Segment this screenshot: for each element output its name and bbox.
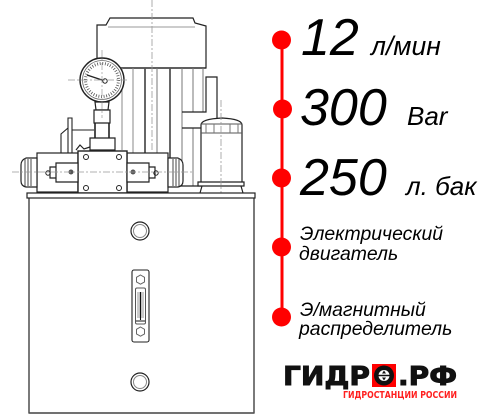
motor label: двигатель bbox=[299, 243, 398, 265]
flow value bbox=[301, 9, 441, 67]
tank value bbox=[299, 149, 478, 207]
flow value: л/мин bbox=[369, 31, 441, 61]
directional valve block bbox=[12, 151, 192, 193]
marker: pressure bbox=[273, 100, 292, 118]
electric motor bbox=[97, 0, 217, 186]
tank value: 250 bbox=[299, 149, 387, 207]
marker: valve bbox=[272, 308, 291, 326]
logo tagline: ГИДРОСТАНЦИИ РОССИИ bbox=[343, 390, 457, 401]
oil level sight gauge bbox=[132, 270, 149, 342]
pressure gauge dial bbox=[68, 50, 128, 118]
pressure value: Bar bbox=[407, 101, 449, 131]
marker: tank volume bbox=[272, 168, 291, 188]
marker: flow bbox=[272, 30, 291, 50]
oil filter bbox=[198, 100, 244, 193]
pressure value bbox=[300, 79, 449, 137]
valve label bbox=[298, 299, 452, 340]
valve label: распределитель bbox=[298, 318, 452, 340]
pressure gauge stem and bracket bbox=[61, 102, 115, 153]
marker: electric motor bbox=[272, 238, 291, 256]
logo emblem bbox=[372, 364, 396, 387]
pressure value: 300 bbox=[300, 79, 387, 137]
motor label bbox=[299, 223, 443, 265]
red connector line with markers bbox=[272, 30, 292, 326]
motor label: Электрический bbox=[300, 223, 443, 245]
logo domain: .РФ bbox=[398, 362, 457, 392]
upper filler port bbox=[131, 222, 149, 240]
flow value: 12 bbox=[301, 9, 359, 67]
oil tank bbox=[27, 193, 255, 413]
lower drain port bbox=[131, 373, 149, 391]
valve label: Э/магнитный bbox=[300, 299, 426, 321]
tank value: л. бак bbox=[404, 171, 478, 201]
logo wordmark: ГИДР bbox=[283, 362, 370, 392]
hydraulic station drawing bbox=[12, 0, 255, 413]
logo bbox=[283, 362, 457, 401]
